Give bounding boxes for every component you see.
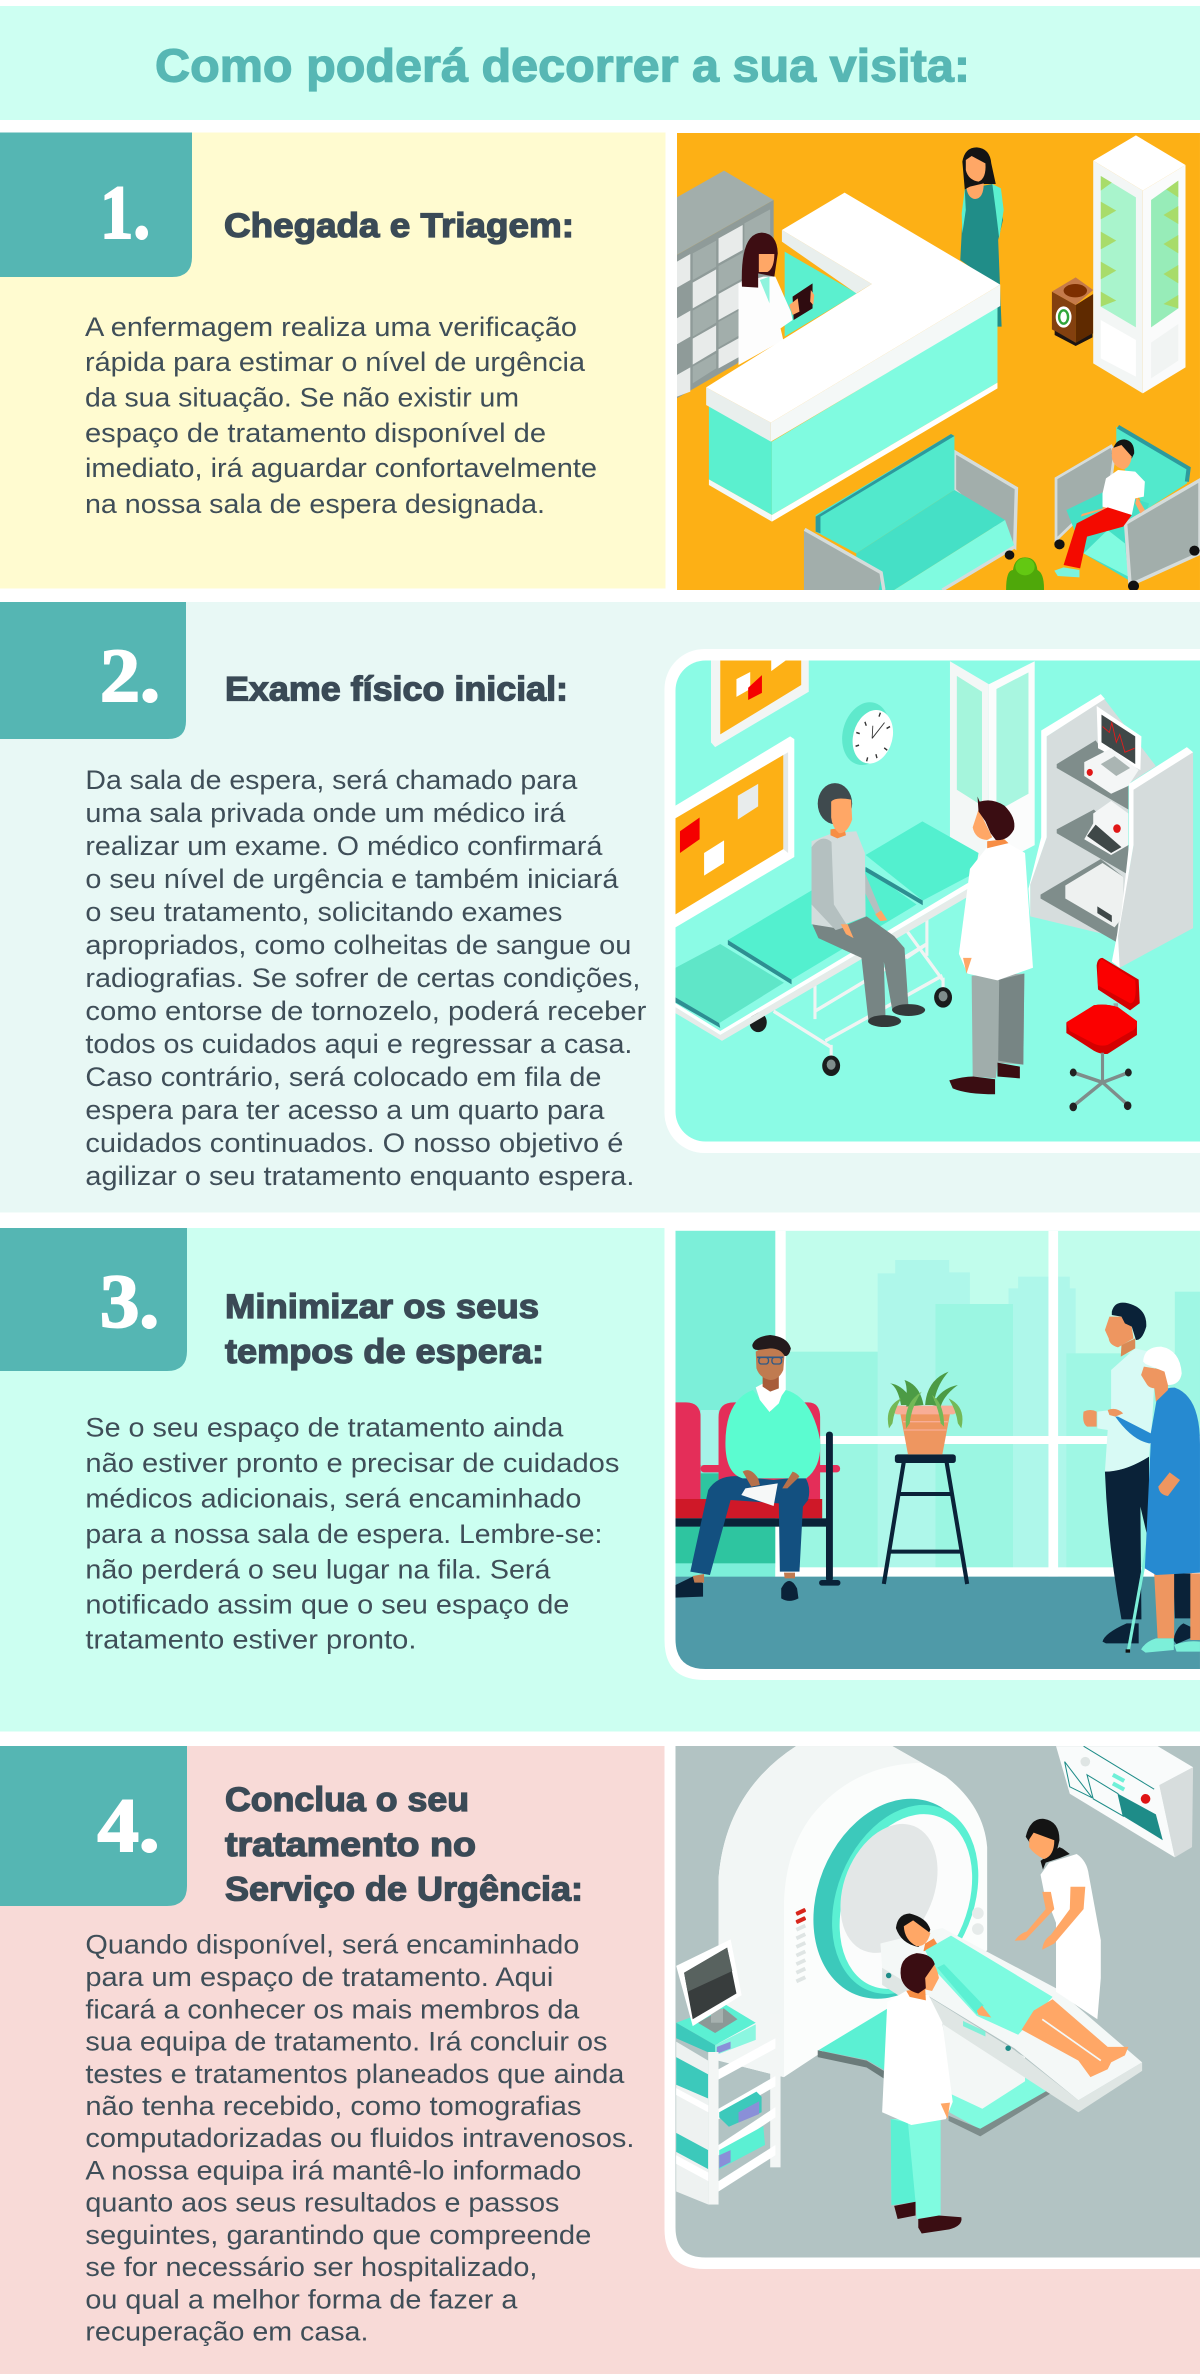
person standing [960, 147, 1004, 327]
panel: step 4 [0, 1746, 1200, 2374]
step 4 number badge [0, 1746, 187, 1906]
step 3 body text: Se o seu espaço de tratamento ainda [85, 1413, 564, 1443]
panel: step 2 [0, 602, 1200, 1212]
upper notice board [711, 660, 809, 747]
window and skyline [675, 1231, 1200, 1577]
display cabinet [1093, 135, 1186, 393]
step 2 body text: como entorse de tornozelo, poderá receber [85, 996, 646, 1026]
step 2 body text: Caso contrário, será colocado em fila de [85, 1062, 601, 1092]
recycling bin [1052, 277, 1093, 346]
step 2 body text: o seu nível de urgência e também iniciará [85, 864, 619, 894]
title banner [0, 6, 1200, 120]
step 1 body text: na nossa sala de espera designada. [85, 489, 545, 519]
seated patient [812, 783, 925, 1027]
step 4 body text: ou qual a melhor forma de fazer a [85, 2284, 518, 2314]
step 4 body text: sua equipa de tratamento. Irá concluir os [85, 2027, 607, 2057]
step 3 body text: médicos adicionais, será encaminhado [85, 1483, 581, 1513]
step 4 body text: Quando disponível, será encaminhado [85, 1930, 579, 1960]
step 4 number badge: 4. [98, 1784, 160, 1868]
standing man [1083, 1303, 1194, 1644]
step 2 body text [85, 765, 646, 1191]
step 3 body text: não perderá o seu lugar na fila. Será [85, 1554, 551, 1584]
sofa [804, 434, 1016, 590]
reception counter [706, 193, 1000, 522]
window [950, 661, 1035, 869]
nurse [739, 233, 814, 365]
filing cabinet [677, 171, 774, 398]
step 4 body text: A nossa equipa irá mantê-lo informado [85, 2156, 581, 2186]
step 2 body text: agilizar o seu tratamento enquanto espera. [85, 1161, 634, 1191]
step 2 body text: o seu tratamento, solicitando exames [85, 897, 562, 927]
step 4 heading: tratamento no [225, 1826, 476, 1864]
title: Como poderá decorrer a sua visita: [155, 40, 970, 92]
step 1 body text [85, 312, 597, 519]
scanner body [719, 1746, 1005, 2077]
lying patient [896, 1914, 1128, 2077]
step 1 body text: espaço de tratamento disponível de [85, 418, 546, 448]
wall clock [842, 702, 894, 765]
step 1 body text: imediato, irá aguardar confortavelmente [85, 453, 597, 483]
step 2 body text: Da sala de espera, será chamado para [85, 765, 578, 795]
elderly woman with cane [1108, 1347, 1200, 1653]
step 3 heading: Minimizar os seus [225, 1288, 539, 1326]
shelf unit [1028, 694, 1193, 968]
red office chair [1066, 958, 1140, 1111]
step 3 body text: não estiver pronto e precisar de cuidados [85, 1448, 619, 1478]
armchair with seated man [1054, 427, 1200, 591]
step 2 body text: cuidados continuados. O nosso objetivo é [85, 1128, 623, 1158]
step 2 body text: radiografias. Se sofrer de certas condições, [85, 963, 640, 993]
step 2 heading: Exame físico inicial: [225, 670, 568, 708]
inner counter [785, 252, 857, 337]
step 1 number badge [0, 132, 192, 277]
step 4 body text: para um espaço de tratamento. Aqui [85, 1962, 553, 1992]
step 4 heading: Serviço de Urgência: [225, 1871, 583, 1909]
lower notice board [675, 736, 794, 927]
step 4 body text [85, 1930, 634, 2346]
wall control panel [1056, 1746, 1193, 1857]
illustration: CT scanner [675, 1745, 1200, 2260]
step 2 body text: uma sala privada onde um médico irá [85, 798, 566, 828]
nurse [1015, 1819, 1101, 2019]
step 1 heading: Chegada e Triagem: [224, 207, 574, 245]
step 1 body text: A enfermagem realiza uma verificação [85, 312, 577, 342]
step 1 body text: rápida para estimar o nível de urgência [85, 347, 586, 377]
step 4 body text: computadorizadas ou fluidos intravenosos. [85, 2123, 634, 2153]
floor [675, 1577, 1200, 1672]
illustration: waiting room [675, 1231, 1200, 1672]
step 3 body text: tratamento estiver pronto. [85, 1625, 416, 1655]
step 4 body text: testes e tratamentos planeados que ainda [85, 2059, 625, 2089]
step 1 body text: da sua situação. Se não existir um [85, 382, 519, 412]
panel: step 1 text [0, 132, 666, 588]
step 4 body text: não tenha recebido, como tomografias [85, 2091, 581, 2121]
illustration: reception desk [677, 133, 1200, 591]
step 4 body text: seguintes, garantindo que compreende [85, 2220, 591, 2250]
examination bed [675, 821, 979, 1076]
step 4 heading: Conclua o seu [225, 1781, 469, 1819]
step 2 number badge: 2. [100, 634, 160, 718]
potted plant on stool [884, 1372, 967, 1584]
step 2 number badge [0, 602, 186, 739]
step 3 heading [225, 1288, 544, 1371]
step 3 number badge: 3. [100, 1260, 159, 1344]
image frame: step 3 [664, 1213, 1200, 1680]
equipment cart [676, 1939, 781, 2205]
step 2 body text: apropriados, como colheitas de sangue ou [85, 930, 631, 960]
step 1 number badge: 1. [100, 171, 150, 255]
step 4 body text: quanto aos seus resultados e passos [85, 2188, 559, 2218]
step 3 body text: para a nossa sala de espera. Lembre-se: [85, 1519, 602, 1549]
doctor [949, 797, 1033, 1094]
scanner base [818, 2008, 1053, 2136]
plant [1006, 557, 1044, 590]
step 4 heading [225, 1781, 583, 1909]
step 4 body text: se for necessário ser hospitalizado, [85, 2252, 537, 2282]
image frame: step 4 [664, 1732, 1200, 2269]
doctor [882, 1953, 962, 2233]
seated man [675, 1335, 820, 1601]
image frame: step 2 [664, 649, 1200, 1153]
step 4 body text: recuperação em casa. [85, 2316, 368, 2346]
step 2 body text: espera para ter acesso a um quarto para [85, 1095, 605, 1125]
step 2 body text: todos os cuidados aqui e regressar a casa. [85, 1029, 632, 1059]
step 3 body text [85, 1413, 619, 1655]
step 3 number badge [0, 1228, 187, 1371]
patient table [880, 1928, 1142, 2112]
step 3 body text: notificado assim que o seu espaço de [85, 1590, 569, 1620]
illustration: examination room [675, 660, 1200, 1142]
panel: step 3 [0, 1228, 1200, 1732]
step 4 body text: ficará a conhecer os mais membros da [85, 1995, 580, 2025]
step 3 heading: tempos de espera: [225, 1333, 544, 1371]
bench [675, 1402, 840, 1586]
step 2 body text: realizar um exame. O médico confirmará [85, 831, 603, 861]
